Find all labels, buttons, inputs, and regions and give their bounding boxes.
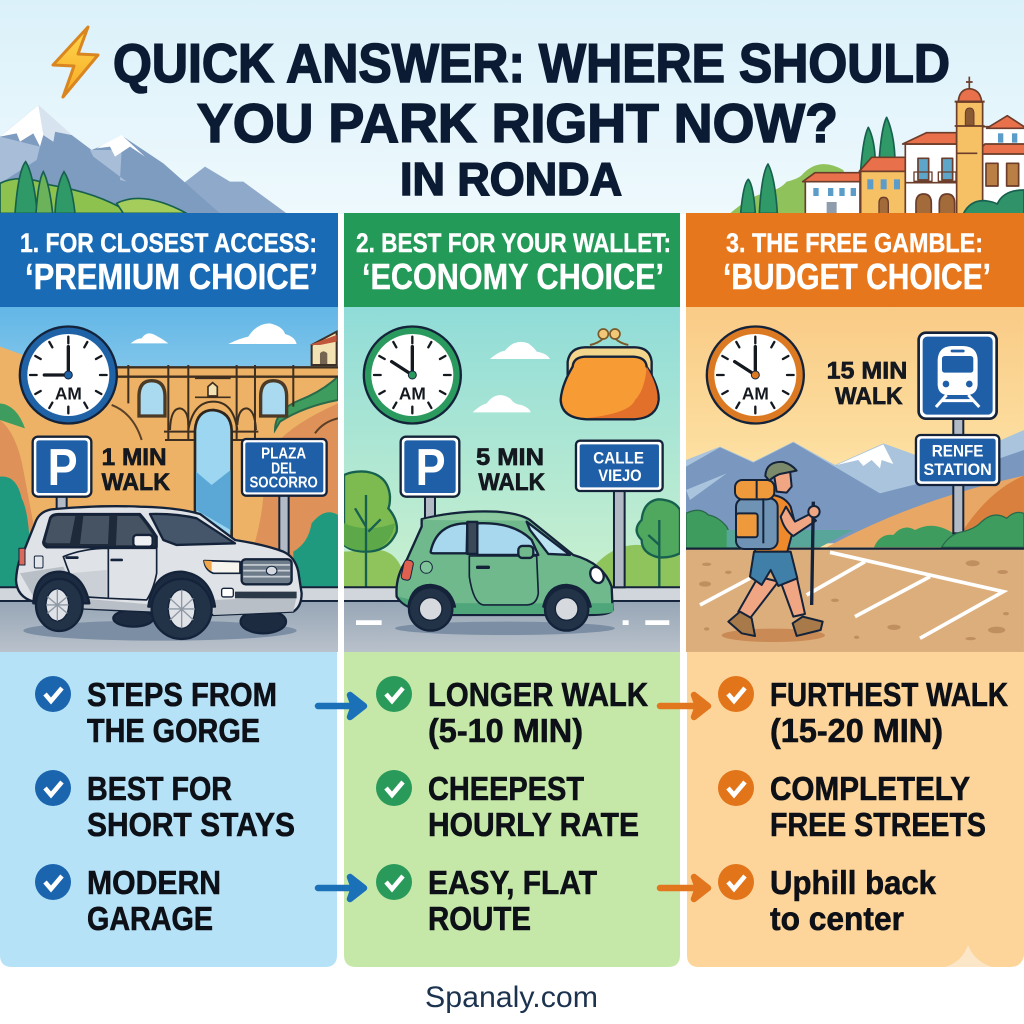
walk time label: 15 MIN [827, 357, 907, 384]
walk time label: 1 MIN [102, 444, 167, 471]
parking sign: P [416, 438, 446, 496]
panel: economy choice header: ‘ECONOMY CHOICE’ [362, 256, 664, 297]
bullet: completely free streets: FREE STREETS [770, 806, 986, 843]
icon: clock: AM [742, 383, 769, 403]
panel: premium choice header: 1. FOR CLOSEST ACCESS: [20, 228, 317, 258]
tree, left [344, 471, 397, 587]
walk time label: WALK [478, 469, 546, 496]
parking sign [401, 437, 459, 497]
bullet: modern garage: GARAGE [87, 900, 213, 937]
bullet: completely free streets [718, 770, 986, 843]
panel: budget choice header: 3. THE FREE GAMBLE: [726, 228, 983, 258]
panel: economy choice header [344, 213, 680, 308]
icon: clock [19, 325, 118, 425]
bullet: cheapest hourly rate: HOURLY RATE [428, 806, 639, 843]
panel: premium choice header [0, 213, 338, 308]
bullet: longer walk [376, 676, 648, 749]
bullet: cheapest hourly rate: CHEEPEST [428, 770, 584, 807]
title: YOU PARK RIGHT NOW? [197, 92, 838, 154]
bullet: longer walk: (5-10 MIN) [428, 712, 583, 749]
icon: clock: AM [399, 383, 426, 403]
title: IN RONDA [400, 153, 622, 205]
street sign: Plaza del Socorro: SOCORRO [249, 475, 318, 492]
title [113, 32, 950, 205]
bullet: easy flat route: ROUTE [428, 900, 531, 937]
street sign: Renfe Station: RENFE [932, 442, 983, 461]
bullet: uphill back to center: Uphill back [770, 864, 937, 901]
bullet: easy flat route [376, 864, 597, 937]
bullet: furthest walk [718, 676, 1008, 749]
parking sign: P [48, 438, 78, 496]
panel: economy choice header: 2. BEST FOR YOUR WALLET: [356, 228, 671, 258]
icon: clock [706, 325, 805, 425]
icon: train sign [919, 333, 997, 419]
street sign: Calle Viejo [576, 441, 663, 491]
illustration: silver SUV [16, 506, 302, 639]
tree, right [637, 499, 680, 587]
icon: lightning bolt [53, 27, 98, 97]
bullet: best for short stays: BEST FOR [87, 770, 232, 807]
scene: Puente Nuevo with SUV [0, 307, 338, 652]
bullet: longer walk: LONGER WALK [428, 676, 648, 713]
panel: premium choice header: ‘PREMIUM CHOICE’ [25, 256, 318, 297]
bullet: best for short stays: SHORT STAYS [87, 806, 295, 843]
bullet: steps from the gorge: THE GORGE [87, 712, 260, 749]
bullet: completely free streets: COMPLETELY [770, 770, 970, 807]
bullet: steps from the gorge: STEPS FROM [87, 676, 277, 713]
bullet: modern garage: MODERN [87, 864, 221, 901]
arrow: premium to economy, bottom [318, 877, 364, 899]
street sign: Plaza del Socorro [242, 439, 327, 496]
bullet: uphill back to center [718, 864, 937, 937]
walk time label: 5 MIN [476, 444, 544, 471]
walk time label [101, 448, 170, 490]
street sign: Renfe Station [916, 435, 999, 485]
illustration: green hatchback [396, 511, 613, 631]
bullet: easy flat route: EASY, FLAT [428, 864, 597, 901]
icon: coin purse [561, 329, 659, 419]
bullet: steps from the gorge [35, 676, 277, 749]
bullet: furthest walk: (15-20 MIN) [770, 712, 943, 749]
panel: budget choice list [687, 652, 1024, 967]
panel: economy choice list [344, 652, 680, 967]
icon: clock: AM [55, 383, 82, 403]
bullet: uphill back to center: to center [770, 900, 904, 937]
walk time label [476, 448, 546, 490]
title: QUICK ANSWER: WHERE SHOULD [113, 32, 950, 94]
mountains and hills, top left [0, 105, 287, 213]
bullet: cheapest hourly rate [376, 770, 639, 843]
scene: small green car on street [344, 307, 680, 652]
scene: hiker walking past free parking [686, 307, 1024, 652]
walk time label: WALK [102, 469, 171, 496]
street sign: Calle Viejo: CALLE [593, 448, 644, 467]
bullet: modern garage [35, 864, 221, 937]
walk time label [828, 362, 906, 404]
street sign: Renfe Station: STATION [923, 460, 992, 479]
icon: clock [363, 325, 462, 425]
arrow: premium to economy, top [318, 695, 364, 717]
arrow: economy to budget, top [660, 695, 708, 717]
footer: website: Spanaly.com [425, 981, 598, 1014]
parking sign [33, 437, 91, 497]
bullet: best for short stays [35, 770, 295, 843]
panel: premium choice list [0, 652, 337, 967]
street sign: Plaza del Socorro: PLAZA [261, 445, 306, 462]
town skyline, top right [730, 77, 1024, 215]
street sign: Calle Viejo: VIEJO [598, 466, 642, 485]
arrow: economy to budget, bottom [660, 877, 708, 899]
street sign: Plaza del Socorro: DEL [271, 460, 296, 477]
illustration: hiker with backpack [722, 462, 825, 642]
panel: budget choice header [686, 213, 1024, 308]
walk time label: WALK [835, 383, 903, 410]
